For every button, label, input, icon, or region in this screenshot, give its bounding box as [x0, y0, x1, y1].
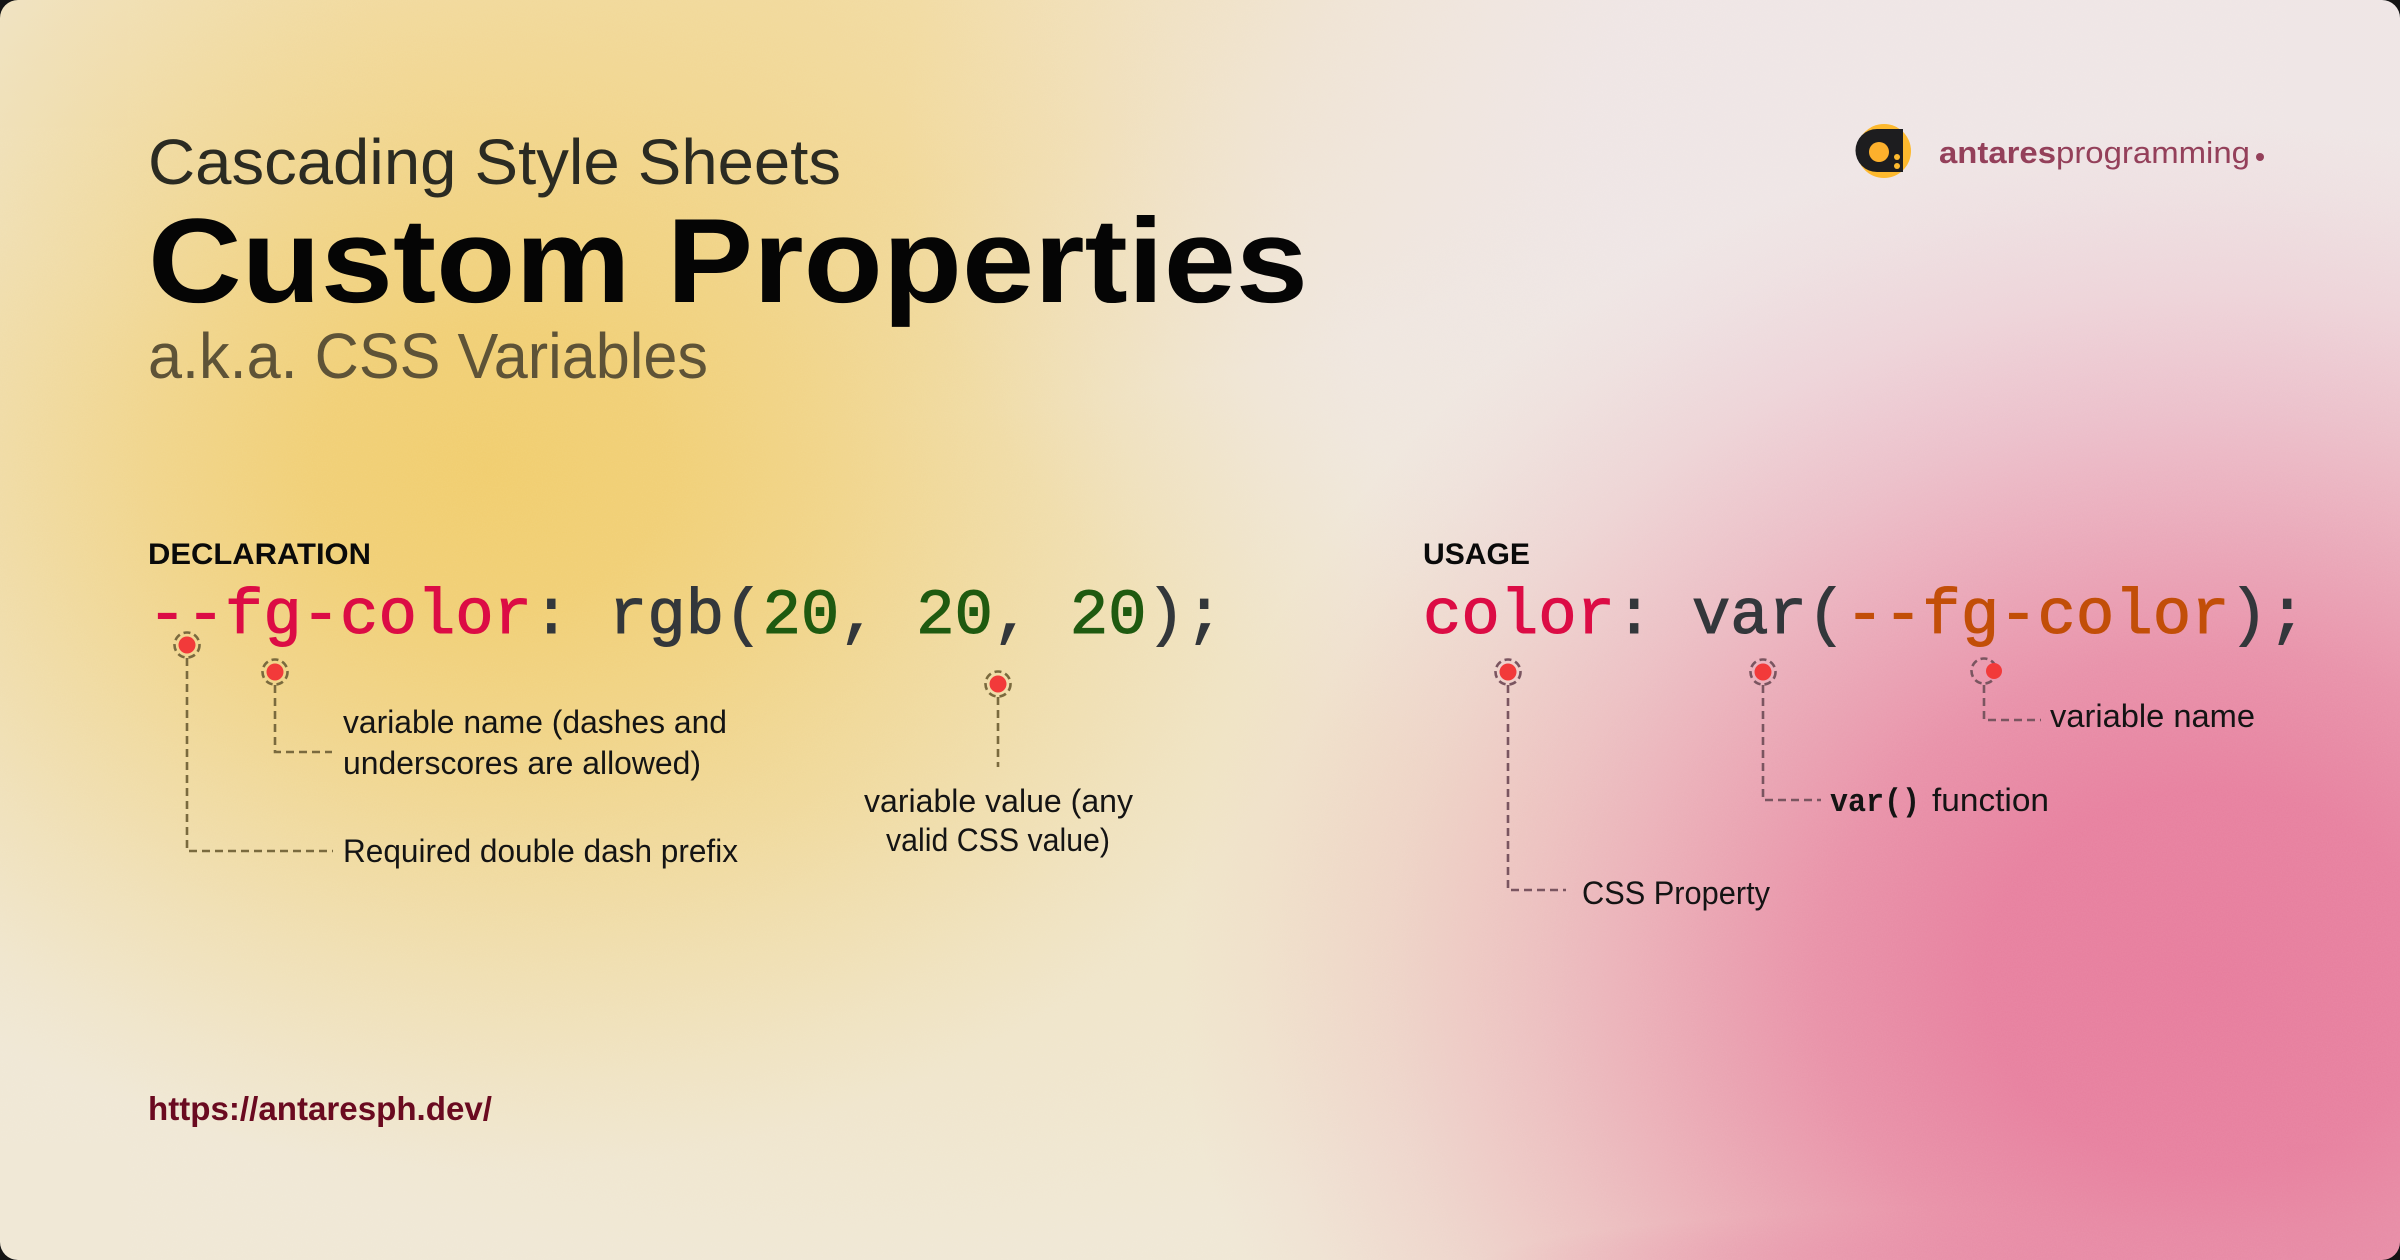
heading: declaration: DECLARATION: [148, 538, 371, 571]
callout: variable name: underscores are allowed): [343, 745, 701, 781]
callout: css property: CSS Property: [1582, 875, 1770, 911]
callout: variable name: [262, 660, 727, 781]
logo wordmark: programming: [2056, 135, 2250, 170]
callout: variable name: variable name (dashes and: [343, 704, 727, 740]
callout: double dash prefix: Required double dash prefix: [343, 833, 738, 869]
heading: usage: USAGE: [1423, 538, 1530, 571]
title: kicker: Cascading Style Sheets: [148, 126, 841, 198]
code: declaration: --fg-color: rgb(20, 20, 20);: [148, 581, 1223, 653]
callout: variable name usage: [1972, 658, 2255, 734]
callout: var function: var(): [1830, 784, 1920, 821]
callout: variable value: valid CSS value): [886, 822, 1110, 858]
url link: https://antaresph.dev/: [148, 1090, 492, 1127]
panel: usage: [1423, 538, 2306, 911]
logo: antaresprogramming: [1855, 124, 2264, 178]
title block: [148, 126, 1308, 392]
logo wordmark: antares: [1939, 135, 2056, 170]
callout: double dash prefix: [174, 632, 738, 869]
callout: variable value: variable value (any: [864, 783, 1133, 819]
logo dot: [2256, 153, 2264, 161]
code: usage: color: var(--fg-color);: [1423, 581, 2306, 653]
callout: var function: [1750, 660, 2049, 821]
title: main heading: Custom Properties: [148, 194, 1308, 328]
callout: variable name usage: variable name: [2050, 698, 2255, 734]
icon: logo mark: [1855, 124, 1911, 178]
callout: variable value: [864, 672, 1133, 858]
title: subtitle: a.k.a. CSS Variables: [148, 320, 708, 392]
callout: css property: [1496, 660, 1770, 911]
callout: var function: function: [1932, 782, 2049, 818]
panel: declaration: [148, 538, 1223, 869]
